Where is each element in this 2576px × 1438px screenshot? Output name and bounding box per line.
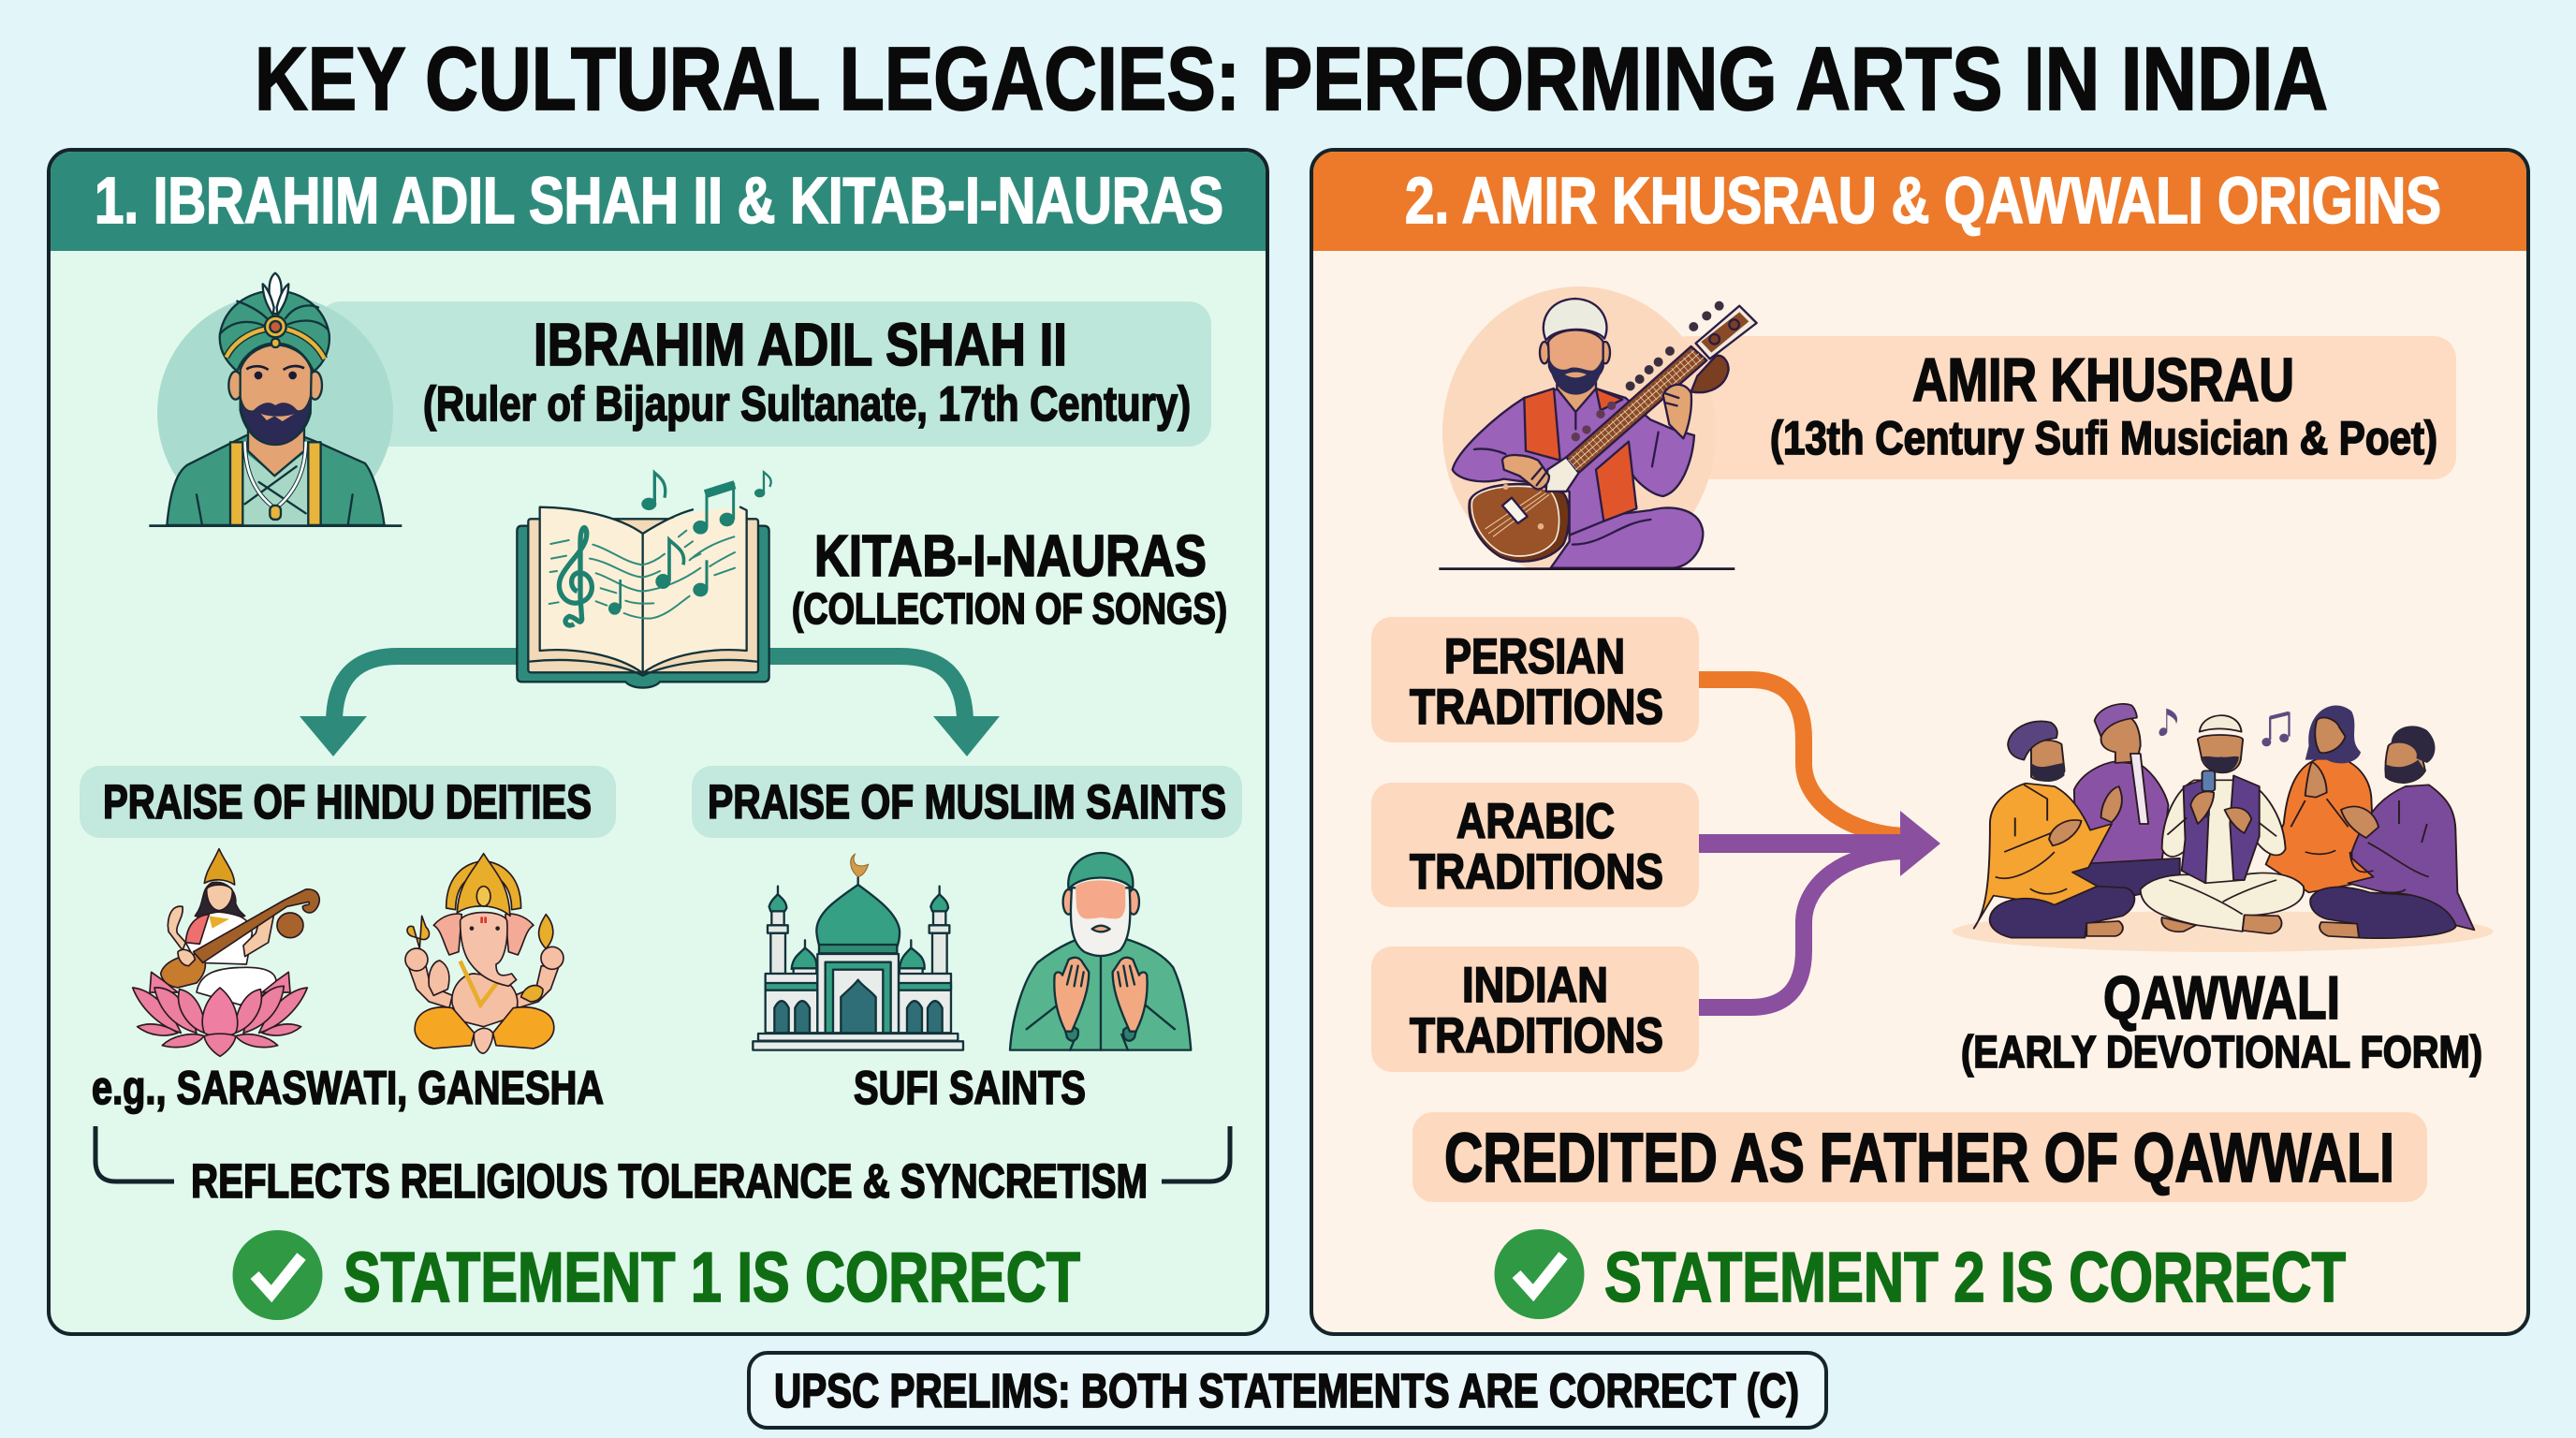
icon: Sufi saint praying bbox=[1010, 853, 1191, 1050]
icon: Amir Khusrau playing sitar bbox=[1439, 286, 1757, 579]
icon: Ganesha seated bbox=[405, 854, 564, 1053]
panel header: teal bbox=[51, 152, 1266, 251]
label: Qawwali: (EARLY DEVOTIONAL FORM) bbox=[1961, 1028, 2482, 1078]
pill: Indian traditions: TRADITIONS bbox=[1410, 1008, 1663, 1064]
label: Qawwali bbox=[1961, 963, 2482, 1078]
verdict: statement 2 is correct bbox=[1494, 1229, 2346, 1319]
name band: Ibrahim Adil Shah II: (Ruler of Bijapur Sultanate, 17th Century) bbox=[423, 377, 1191, 432]
title bbox=[255, 29, 2328, 129]
name band: Ibrahim Adil Shah II: IBRAHIM ADIL SHAH II bbox=[534, 311, 1067, 378]
pill: Persian traditions: PERSIAN bbox=[1444, 629, 1625, 684]
arrow: book to Hindu deities bbox=[300, 656, 524, 756]
pill: Arabic traditions: ARABIC bbox=[1456, 794, 1615, 849]
arrow: Persian to Qawwali bbox=[1699, 680, 1905, 836]
name band: Amir Khusrau: AMIR KHUSRAU bbox=[1912, 345, 2294, 414]
panel: Ibrahim Adil Shah II and Kitab-i-Nauras bbox=[49, 150, 1267, 1334]
pill: praise of Hindu deities: PRAISE OF HINDU DEITIES bbox=[103, 775, 592, 829]
pill: Arabic traditions: TRADITIONS bbox=[1410, 844, 1663, 900]
arrow: book to Muslim saints bbox=[763, 656, 1000, 756]
panel header: teal: 1. IBRAHIM ADIL SHAH II & KITAB-I-NAURAS bbox=[95, 164, 1223, 237]
pill: praise of Hindu deities bbox=[80, 766, 616, 838]
name band: Ibrahim Adil Shah II bbox=[318, 301, 1211, 447]
name band: Amir Khusrau: (13th Century Sufi Musician & Poet) bbox=[1770, 412, 2437, 464]
icon: mosque bbox=[753, 854, 963, 1050]
answer box: UPSC prelims bbox=[749, 1353, 1826, 1428]
pill: Persian traditions: TRADITIONS bbox=[1410, 680, 1663, 735]
label: Qawwali: QAWWALI bbox=[2103, 963, 2340, 1032]
pill: Persian traditions bbox=[1371, 617, 1699, 742]
icon: portrait of Ibrahim Adil Shah II bbox=[149, 273, 402, 531]
bracket with religious tolerance note bbox=[95, 1126, 1230, 1208]
name band: Amir Khusrau bbox=[1666, 336, 2456, 479]
label: Sufi saints: SUFI SAINTS bbox=[854, 1062, 1086, 1114]
title: PERFORMING ARTS IN INDIA bbox=[1262, 29, 2328, 129]
verdict: statement 2 is correct: STATEMENT 2 IS CORRECT bbox=[1604, 1238, 2346, 1316]
verdict: statement 1 is correct: STATEMENT 1 IS CORRECT bbox=[344, 1238, 1080, 1316]
pill: Arabic traditions bbox=[1371, 783, 1699, 907]
verdict: statement 1 is correct bbox=[232, 1230, 1080, 1320]
label: e.g. Saraswati, Ganesha: e.g., SARASWATI, GANESHA bbox=[92, 1062, 604, 1114]
label: Kitab-i-Nauras: (COLLECTION OF SONGS) bbox=[792, 584, 1227, 633]
icon: open book with music notes bbox=[517, 472, 771, 688]
panel header: orange bbox=[1313, 152, 2526, 251]
icon: Qawwali group of five singers bbox=[1953, 704, 2494, 952]
panel: Amir Khusrau and Qawwali origins bbox=[1311, 150, 2528, 1334]
answer box: UPSC prelims: UPSC PRELIMS: BOTH STATEMENTS ARE CORRECT (C) bbox=[774, 1364, 1799, 1417]
pill: praise of Muslim saints bbox=[692, 766, 1242, 838]
pill: Indian traditions: INDIAN bbox=[1462, 958, 1608, 1013]
pill: Indian traditions bbox=[1371, 946, 1699, 1072]
arrow: Arabic to Qawwali bbox=[1699, 811, 1940, 876]
label: Kitab-i-Nauras bbox=[792, 524, 1227, 633]
label: Kitab-i-Nauras: KITAB-I-NAURAS bbox=[814, 524, 1207, 589]
pill: praise of Muslim saints: PRAISE OF MUSLIM SAINTS bbox=[708, 775, 1226, 829]
bracket with religious tolerance note: REFLECTS RELIGIOUS TOLERANCE & SYNCRETISM bbox=[191, 1154, 1148, 1208]
icon: Saraswati on lotus with veena bbox=[133, 849, 319, 1056]
arrow: Indian to Qawwali bbox=[1699, 851, 1905, 1007]
title: KEY CULTURAL LEGACIES: bbox=[255, 29, 1240, 129]
